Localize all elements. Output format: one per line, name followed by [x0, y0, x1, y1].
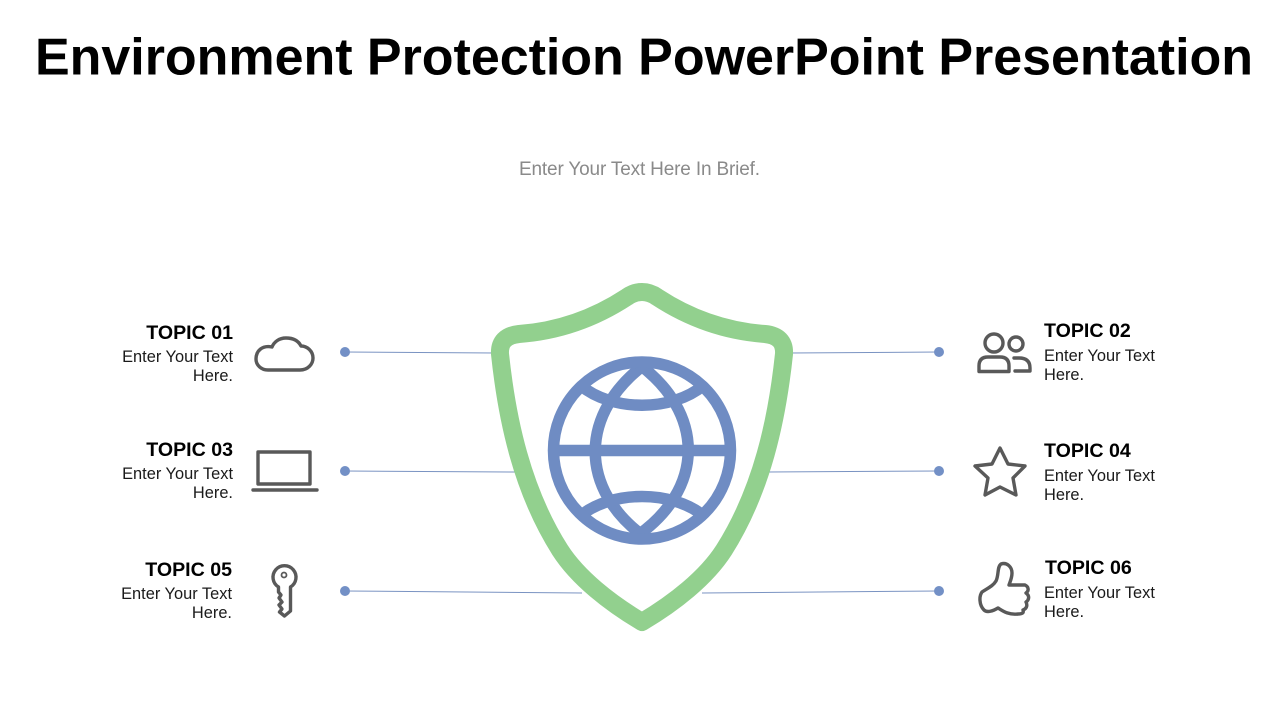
topic 01 text: TOPIC 01 — [146, 322, 233, 344]
topic 01 text: Here. — [193, 367, 233, 385]
connector: topic 05 — [340, 586, 582, 596]
topic 04 text: TOPIC 04 — [1044, 440, 1131, 462]
subtitle: Enter Your Text Here In Brief. — [519, 159, 760, 180]
topic 04 text — [1044, 440, 1155, 504]
topic 02 text: Here. — [1044, 366, 1084, 384]
icon: cloud — [256, 338, 313, 370]
topic 03 text: Enter Your Text — [122, 465, 233, 483]
topic 02 text — [1044, 320, 1155, 384]
topic 04 text: Enter Your Text — [1044, 467, 1155, 485]
connector: topic 02 — [790, 347, 944, 357]
icon: shield — [500, 292, 784, 622]
topic 02 text: TOPIC 02 — [1044, 320, 1131, 342]
topic 04 text: Here. — [1044, 486, 1084, 504]
connector: topic 06 — [702, 586, 944, 596]
icon: laptop — [253, 452, 317, 490]
title: Environment Protection PowerPoint Presentation — [35, 28, 1253, 86]
icon: thumbs up — [980, 564, 1029, 614]
topic 01 text — [122, 322, 233, 385]
topic 06 text — [1044, 557, 1155, 621]
connector: topic 03 — [340, 466, 516, 476]
topic 03 text: TOPIC 03 — [146, 439, 233, 461]
topic 05 text: TOPIC 05 — [145, 559, 232, 581]
icon: people — [979, 334, 1030, 372]
topic 03 text — [122, 439, 233, 502]
topic 06 text: TOPIC 06 — [1045, 557, 1132, 579]
topic 05 text: Here. — [192, 604, 232, 622]
topic 05 text: Enter Your Text — [121, 585, 232, 603]
topic 06 text: Enter Your Text — [1044, 584, 1155, 602]
topic 05 text — [121, 559, 232, 622]
topic 02 text: Enter Your Text — [1044, 347, 1155, 365]
icon: star — [975, 448, 1025, 495]
topic 06 text: Here. — [1044, 603, 1084, 621]
icon: key — [273, 566, 296, 616]
connector: topic 01 — [340, 347, 495, 357]
connector: topic 04 — [768, 466, 944, 476]
topic 03 text: Here. — [193, 484, 233, 502]
topic 01 text: Enter Your Text — [122, 348, 233, 366]
icon: globe — [554, 362, 730, 539]
